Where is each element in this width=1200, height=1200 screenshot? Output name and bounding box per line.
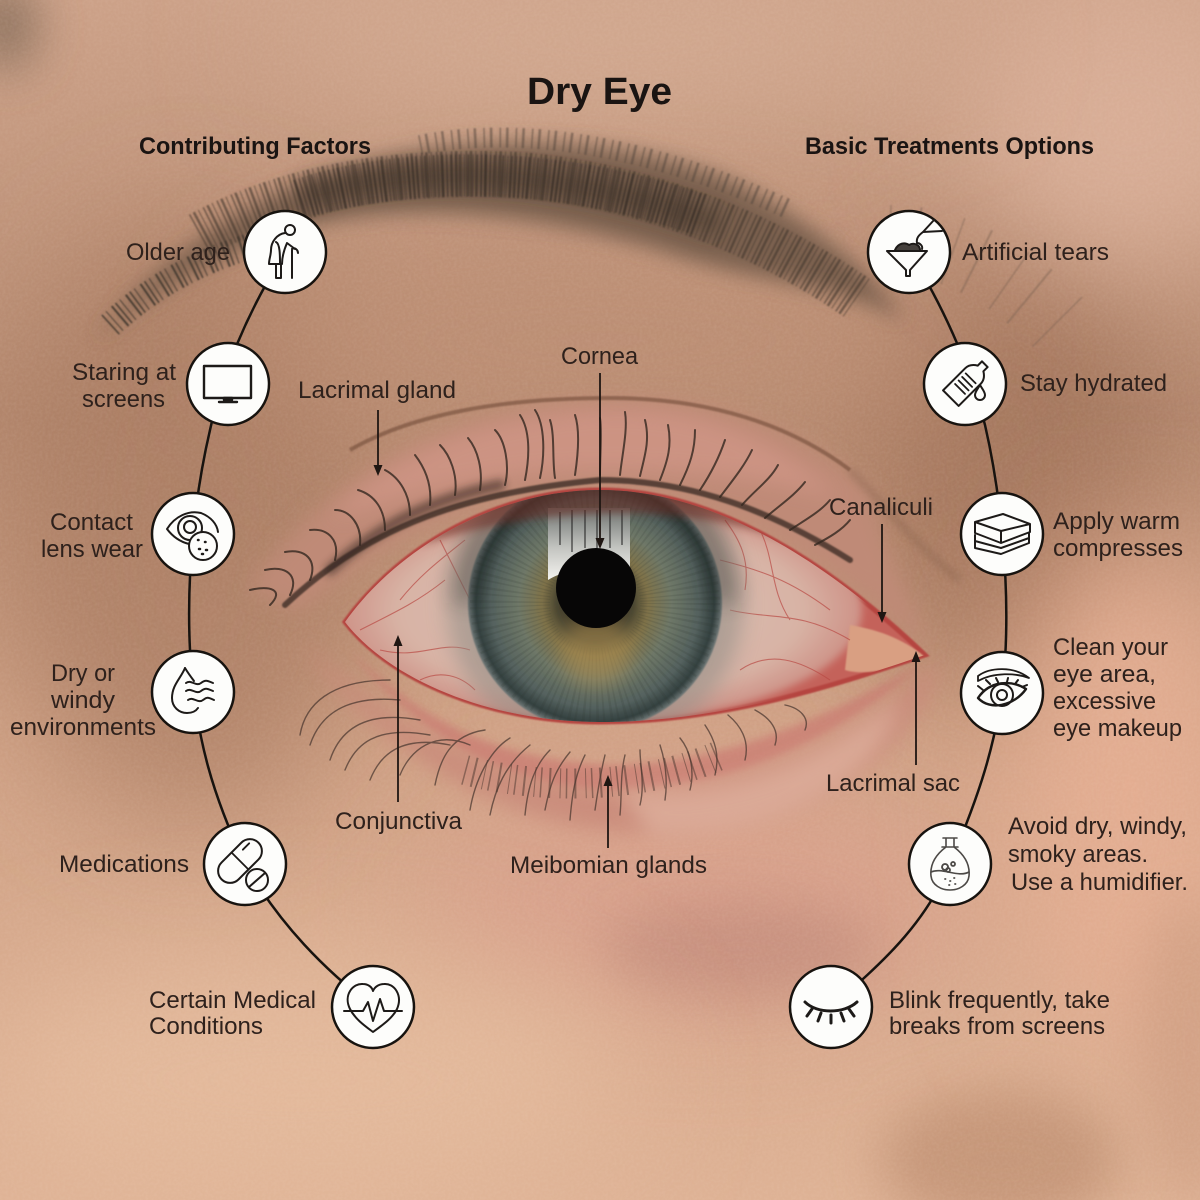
panel: contributing factors timeline xyxy=(10,211,414,1048)
treatment: apply warm compresses xyxy=(961,493,1183,575)
factor: staring at screens xyxy=(72,343,269,425)
anatomy label: lacrimal gland with arrow: Lacrimal gland xyxy=(298,377,456,404)
treatment: clean your eye area: Clean your xyxy=(1053,634,1168,661)
treatment: clean your eye area: eye makeup xyxy=(1053,715,1182,742)
anatomy label: conjunctiva with arrow xyxy=(335,635,463,835)
lower eyelashes xyxy=(300,680,806,820)
panel: basic treatment options timeline xyxy=(790,211,1188,1048)
treatment: blink frequently: Blink frequently, take xyxy=(889,987,1110,1014)
factor: contact lens wear: lens wear xyxy=(41,536,143,563)
treatment: blink frequently xyxy=(790,966,1110,1048)
heading: contributing factors: Contributing Factors xyxy=(139,133,371,160)
upper eyelid and crease xyxy=(250,398,960,650)
factor: older age: Older age xyxy=(126,239,230,266)
treatment: clean your eye area: eye area, xyxy=(1053,661,1156,688)
anatomy label: conjunctiva with arrow: Conjunctiva xyxy=(335,808,463,835)
title: Dry Eye xyxy=(527,71,672,113)
anatomy label: lacrimal sac with arrow xyxy=(826,651,960,797)
factor: staring at screens: Staring at xyxy=(72,359,176,386)
treatment: clean your eye area: excessive xyxy=(1053,688,1156,715)
factor: contact lens wear xyxy=(41,493,234,575)
treatment: avoid dry windy smoky areas xyxy=(909,813,1188,905)
lower eyelid xyxy=(300,640,940,835)
treatment: artificial tears xyxy=(868,211,1109,293)
anatomy label: lacrimal sac with arrow: Lacrimal sac xyxy=(826,770,960,797)
heading: basic treatments options: Basic Treatments Options xyxy=(805,133,1094,160)
factor: medications xyxy=(59,823,286,905)
anatomy label: cornea with arrow: Cornea xyxy=(561,343,639,370)
anatomy label: meibomian glands with arrow xyxy=(510,775,707,879)
treatment: avoid dry windy smoky areas: Avoid dry, windy, xyxy=(1008,813,1187,840)
treatment: stay hydrated xyxy=(924,343,1167,425)
treatment: clean your eye area xyxy=(961,634,1182,742)
factor: dry or windy environments: environments xyxy=(10,714,156,741)
factor: certain medical conditions: Certain Medical xyxy=(149,987,316,1014)
factor: certain medical conditions xyxy=(149,966,414,1048)
treatment: apply warm compresses: Apply warm xyxy=(1053,508,1180,535)
eyebrow xyxy=(95,138,1070,340)
factor: older age xyxy=(126,211,326,293)
anatomy label: canaliculi with arrow xyxy=(829,494,933,623)
factor: medications: Medications xyxy=(59,851,189,878)
upper eyelashes xyxy=(250,410,850,605)
anatomy label: lacrimal gland with arrow xyxy=(298,377,456,476)
factor: staring at screens: screens xyxy=(82,386,165,413)
treatment: blink frequently: breaks from screens xyxy=(889,1013,1105,1040)
anatomy label: canaliculi with arrow: Canaliculi xyxy=(829,494,933,521)
treatment: apply warm compresses: compresses xyxy=(1053,535,1183,562)
factor: dry or windy environments: windy xyxy=(50,687,115,714)
factor: contact lens wear: Contact xyxy=(50,509,133,536)
factor: dry or windy environments: Dry or xyxy=(51,660,115,687)
treatment: avoid dry windy smoky areas: smoky areas. xyxy=(1008,841,1148,868)
treatment: stay hydrated: Stay hydrated xyxy=(1020,370,1167,397)
eyeball with bloodshot sclera xyxy=(342,486,930,726)
anatomy label: meibomian glands with arrow: Meibomian glands xyxy=(510,852,707,879)
anatomy label: cornea with arrow xyxy=(561,343,639,549)
treatment: artificial tears: Artificial tears xyxy=(962,239,1109,266)
treatment: avoid dry windy smoky areas: Use a humidifier. xyxy=(1011,869,1188,896)
factor: dry or windy environments xyxy=(10,651,234,741)
factor: certain medical conditions: Conditions xyxy=(149,1013,263,1040)
